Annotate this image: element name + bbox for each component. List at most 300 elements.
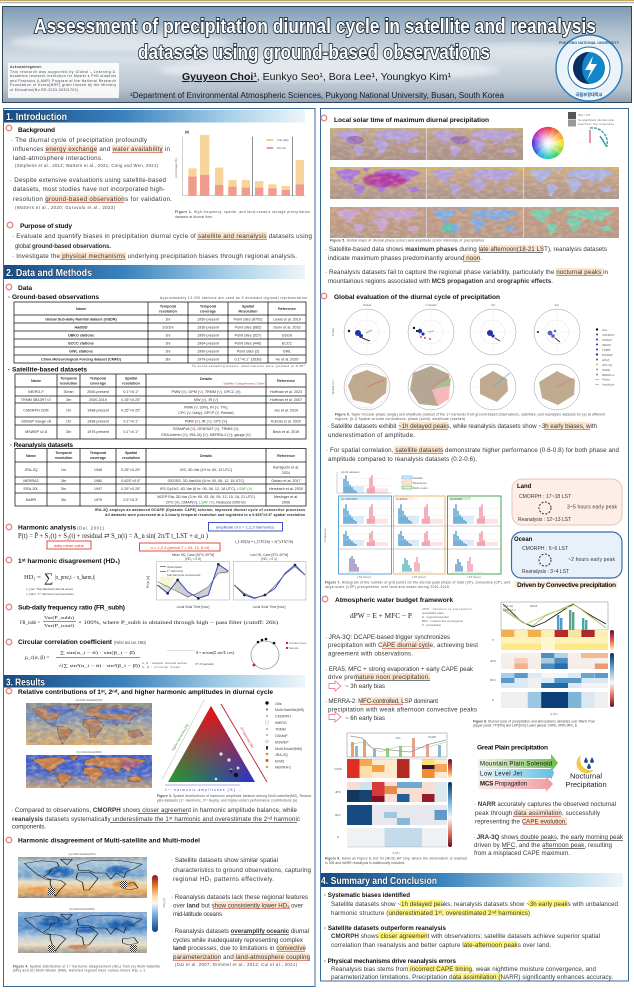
nocturnal precipitation label: Nocturnal bbox=[570, 772, 602, 780]
figure caption: polar: regions. (b-f) Spatial circular correlations, phase (solid), amplitude (dashed) bbox=[335, 417, 465, 421]
satellite table: 0.25°×0.25° bbox=[121, 398, 141, 402]
polar legend: NARR bbox=[602, 368, 610, 372]
reanalysis table: 3hr bbox=[61, 498, 67, 502]
harmonic line charts: Observation bbox=[167, 565, 183, 569]
reanalysis table: coverage bbox=[90, 456, 106, 460]
circular correlation: ᾱ, β̄ : circular mean bbox=[142, 665, 180, 669]
phase findings: · Reanalysis datasets fail to capture the regional phase variability, particularly the nocturnal peaks in bbox=[325, 269, 609, 276]
great plain arrows: Mountain Plain Solenoid bbox=[480, 762, 552, 768]
ground-based table: UBKO stations bbox=[68, 334, 94, 338]
colorbar: HD₁ [σ] bbox=[162, 898, 166, 908]
water budget chart one: MFC bbox=[490, 678, 496, 682]
sub-daily frequency ratio bbox=[6, 604, 278, 628]
satellite and reanalysis findings: parameterization and land-atmosphere coupling bbox=[173, 954, 311, 961]
nocturnal precipitation label: Precipitation bbox=[565, 780, 607, 789]
heat block one bbox=[347, 759, 447, 778]
circular correlation: Circular correlation coefficient bbox=[18, 639, 113, 646]
histogram panel: (b) CMORPH bbox=[341, 497, 358, 501]
map: multi-satellite: (a) Multi-Satellite(MS) bbox=[75, 698, 103, 702]
narr jra text: from a misplaced CAPE maximum. bbox=[474, 850, 570, 857]
background block: land-atmosphere interactions. bbox=[13, 155, 103, 162]
figure 1 bar chart: percentage [%] bbox=[174, 158, 178, 177]
water budget chart one: MERRA-2 bbox=[503, 608, 516, 612]
figure caption: HD: (MS) and (b) Multi-Model (MM). Hatched regions have values where HD₁ ≥ 1 bbox=[13, 968, 145, 972]
ground-based table: Point sites (2) bbox=[237, 350, 259, 354]
satellite table: MSWEP v2.8 bbox=[25, 430, 47, 434]
reanalysis table: NARR bbox=[26, 498, 37, 502]
background block: · Despite extensive evaluations using satellite-based bbox=[10, 177, 167, 184]
ground-based table: HadISD bbox=[74, 326, 88, 330]
harmonic line charts bbox=[146, 553, 306, 609]
section 4 heading bbox=[321, 873, 623, 887]
comparison text bbox=[11, 807, 300, 830]
sub-daily frequency ratio: Sub-daily frequency ratio (FR_subh) bbox=[18, 604, 125, 612]
figure 1 bar chart: datasets at diurnal time. bbox=[175, 215, 213, 219]
satellite table: Spatial bbox=[125, 376, 137, 380]
jra era merra text: · JRA-3Q: DCAPE-based trigger synchronizes bbox=[325, 634, 450, 641]
figure caption: histogram: large-scale (LSP) precipitation over land and ocean during 2001-2016. bbox=[325, 585, 450, 589]
harmonic line charts: Sub-harmonic components bbox=[167, 573, 201, 577]
phase map row 1 bbox=[330, 128, 523, 160]
satellite and reanalysis findings: characteristics to ground observations, capturing bbox=[173, 867, 312, 874]
affiliation: ¹Department of Environmental Atmospheric Sciences, Pukyong National University, Busan, South Korea bbox=[130, 91, 505, 100]
satellite table: resolution bbox=[60, 382, 78, 386]
reanalysis table: GEOSS, 3D-Var/IAU (6 hr: 00, 06, 12, 18 UTC) bbox=[168, 479, 244, 483]
land callout bbox=[512, 479, 622, 525]
map: multi-model bbox=[26, 750, 152, 788]
satellite table: Satellite / Gauge-based / Other bbox=[223, 382, 265, 386]
figure caption: chart one: (Upper panel: TP [hPa] and LSP [mm]; Lower panels: CAPE, dPW, MFC, E. bbox=[473, 724, 578, 728]
satellite table: 2000-2019 bbox=[89, 398, 107, 402]
ground-based table: 1hr bbox=[165, 342, 171, 346]
sub-daily frequency ratio: × 100%, where P_subh is obtained through high − pass filter (cutoff: 26h) bbox=[78, 619, 278, 626]
ground-based table: · Ground-based observations bbox=[8, 294, 99, 301]
ocean callout bbox=[512, 532, 622, 578]
map: HD multi-model bbox=[18, 907, 147, 953]
acknowledgment box: This research was supported by Global – Learning & bbox=[10, 70, 116, 74]
university logo: 국립부경대학교 bbox=[576, 91, 603, 98]
amplitude callout bbox=[208, 522, 282, 531]
reanalysis table: 0.625°×0.5° bbox=[121, 479, 141, 483]
colorbar bbox=[152, 875, 166, 932]
satellite table: 1hr bbox=[66, 408, 72, 412]
water budget equation: MFC : moisture flux convergence bbox=[422, 619, 463, 623]
first harmonic disagreement: |x_prec,t − x_harm,t| bbox=[55, 575, 95, 581]
ground-based table: China Meteorological Forcing dataset (CMFD) bbox=[41, 358, 122, 362]
clock diagram: Circular mean bbox=[289, 641, 307, 645]
ternary legend: JRA-3Q bbox=[275, 753, 288, 757]
great plain arrows: Low Level Jet bbox=[480, 772, 522, 778]
ground-based table: Point sites (527) bbox=[235, 334, 261, 338]
ground-based table: coverage bbox=[200, 310, 216, 314]
satellite table: PMW (V), IR (V), CPC (V) bbox=[185, 420, 227, 424]
jra era merra text: drive premature noon precipitation. bbox=[328, 674, 430, 681]
first harmonic disagreement: HD₁ = bbox=[24, 574, 41, 581]
histogram panel: LST (hour) bbox=[412, 575, 426, 579]
ternary legend: Multi-Model(MM) bbox=[275, 747, 302, 751]
purpose of study bbox=[7, 222, 313, 260]
reanalysis table: 1980 bbox=[94, 479, 102, 483]
title: datasets using ground-based observations bbox=[138, 42, 490, 64]
figure caption: phase: Figure 5. Global maps of diurnal phase (color) and amplitude (color intensity) of precipitation. bbox=[330, 238, 485, 242]
map: HD multi-satellite bbox=[18, 852, 147, 898]
comparison text: components. bbox=[12, 824, 46, 830]
ternary legend: Multi-Satellite(MS) bbox=[275, 708, 304, 712]
heat block four bbox=[347, 828, 447, 847]
water budget chart two: dPW bbox=[335, 790, 341, 794]
background block: Background bbox=[18, 127, 55, 134]
circular correlation: ∑ sin(α_i − ᾱ) · sin(β_i − β̄) bbox=[60, 650, 136, 655]
great plain heading: Great Plain precipitation bbox=[477, 744, 548, 752]
circular correlation bbox=[6, 638, 307, 669]
water budget chart one: dPW bbox=[490, 659, 496, 663]
polar legend: IMERG bbox=[602, 343, 611, 347]
ternary legend: Obs bbox=[275, 702, 282, 706]
first harmonic disagreement bbox=[6, 557, 120, 596]
reanalysis table: 2006 bbox=[282, 500, 290, 504]
arrow: early bias 6h bbox=[329, 712, 385, 722]
phase findings: mountainous regions associated with MCS propagation and orographic effects. bbox=[328, 278, 553, 285]
reanalysis table: resolution bbox=[122, 456, 141, 460]
satellite table: PMW (V), GPM (V), TRMM (V), GPCC (V) bbox=[171, 390, 241, 394]
figure caption: ternary: ysis-datasets (1ˢᵗ Harmonic, 2ⁿᵈ Gophy, and higher-order) performance contributions (a) bbox=[157, 798, 297, 802]
reanalysis table: 3hr bbox=[61, 487, 67, 491]
jra era merra text: · ERA5: MFC + strong evaporation + early CAPE peak bbox=[325, 666, 474, 673]
ternary legend: IMERG bbox=[275, 721, 287, 725]
water budget chart one bbox=[490, 602, 614, 716]
background block: (Stephens et al., 2012; Watters et al., 2021; Cong and Wen, 2021) bbox=[15, 163, 159, 168]
figure 1 bar chart: Diurnal bbox=[277, 146, 286, 150]
ground-based table: 1979-present bbox=[197, 358, 219, 362]
ground-based table: 3hr bbox=[165, 358, 171, 362]
arrow: early bias 3h: ~ 3h early bias bbox=[345, 683, 385, 690]
satellite table: coverage bbox=[90, 382, 106, 386]
satellite table: 1998-present bbox=[87, 420, 109, 424]
map: multi-satellite bbox=[26, 698, 152, 745]
satellite table: Temporal bbox=[90, 376, 106, 380]
ground-based table: Point sites (8702) bbox=[234, 318, 262, 322]
ground-based table: Point sites (446) bbox=[235, 342, 261, 346]
reanalysis table: 1hr bbox=[61, 468, 67, 472]
purpose of study: Purpose of study bbox=[20, 223, 72, 230]
daily mean callout bbox=[47, 541, 91, 549]
ternary legend: TRMM bbox=[275, 728, 286, 732]
satellite table: 30min bbox=[63, 390, 74, 394]
polar spatial correlation row: Spatial corr. bbox=[331, 379, 335, 394]
global evaluation findings: · For spatial correlation, satellite datasets demonstrate higher performance (0.6-0.8) for both phase and bbox=[326, 447, 620, 454]
polar phase row: Global bbox=[363, 303, 371, 307]
color wheel bbox=[532, 127, 564, 159]
satellite and reanalysis findings: · Reanalysis datasets lack these regional features bbox=[171, 894, 308, 901]
summary: satellite outperform: correlation than reanalysis and better capture late-afternoon peaks over land. bbox=[331, 942, 551, 949]
phase findings bbox=[325, 245, 609, 285]
land callout: 3~5 hours early peak bbox=[567, 504, 618, 510]
phase findings: indicate maximum phases predominantly around noon. bbox=[328, 255, 482, 262]
satellite table: Huffman et al. 2023 bbox=[270, 390, 302, 394]
reanalysis table: Reference bbox=[277, 454, 295, 458]
summary: physical mechanisms: · Physical mechanisms drive reanalysis errors bbox=[324, 958, 457, 965]
satellite table: Reference bbox=[277, 379, 295, 383]
water budget chart one: [LST] bbox=[551, 712, 558, 716]
satellite table: Kubota et al. 2020 bbox=[271, 420, 301, 424]
satellite table: Beck et al. 2019 bbox=[273, 430, 299, 434]
water budget chart two: E bbox=[337, 835, 339, 839]
reanalysis table: Details bbox=[200, 454, 212, 458]
summary: physical mechanisms bbox=[324, 958, 613, 981]
ground-based table: 1950-present bbox=[197, 318, 219, 322]
water budget chart two: CAPE bbox=[334, 767, 342, 771]
icon: moon and droplets bbox=[577, 755, 594, 773]
ground-based table: Temporal bbox=[200, 304, 216, 308]
water budget chart two: [LST] bbox=[393, 851, 400, 855]
satellite and reanalysis findings bbox=[171, 857, 312, 967]
phase map row 3 bbox=[330, 207, 619, 238]
ground-based table: 1964-present bbox=[197, 342, 219, 346]
figure caption: ternary: Figure 3. Spatial distributions of harmonic amplitude balance among Multi-satellite(MS), Reanal- bbox=[157, 794, 312, 798]
jra era merra text: agreement with observations. bbox=[328, 650, 413, 658]
background block: datasets, most studies have not incorporated high- bbox=[13, 186, 165, 193]
polar spatial correlation row bbox=[331, 364, 580, 410]
polar legend: ERA5 bbox=[602, 358, 610, 362]
phase findings: · Satellite-based data shows maximum phases during late afternoon(18-21 LST), reanalysis datasets bbox=[325, 246, 607, 253]
reanalysis table: JRA-3Q bbox=[24, 468, 38, 472]
reanalysis table: 0.25°×0.25° bbox=[121, 468, 141, 472]
jra era merra text bbox=[325, 634, 478, 714]
acknowledgment box: Academic research institution for Master's PhD students bbox=[10, 74, 116, 78]
reanalysis table: Hersbach et al. 2020 bbox=[269, 487, 303, 491]
harmonic line charts: (HD₁ = 0.1) bbox=[261, 557, 277, 561]
ground-based table: GWL bbox=[283, 350, 291, 354]
satellite table: 1hr bbox=[66, 420, 72, 424]
satellite table: 1998-present bbox=[87, 408, 109, 412]
nocturnal precipitation label bbox=[565, 772, 607, 789]
harmonic analysis: Harmonic analysis bbox=[18, 524, 76, 532]
jra era merra text: precipitation with weak afternoon convective peaks bbox=[328, 706, 477, 714]
ground-based table: ECCC stations bbox=[68, 342, 94, 346]
local solar time heading: Local solar time of maximum diurnal precipitation bbox=[334, 117, 489, 124]
satellite table: CPC (V, Daily), GPCP (V, Pentad) bbox=[178, 411, 234, 415]
section 2 heading: 2. Data and Methods bbox=[6, 268, 92, 279]
global evaluation heading: Global evaluation of the diurnal cycle of precipitation bbox=[334, 294, 500, 301]
ground-based table: GWL stations bbox=[69, 350, 93, 354]
harmonic line charts: Mean HD₁ Case [45°N, 95°W] bbox=[172, 553, 214, 557]
map: multi-model: (b) Multi-Model(MM) bbox=[76, 750, 102, 754]
reanalysis table: Temporal bbox=[55, 451, 72, 455]
narr jra text: · NARR accurately captures the observed nocturnal bbox=[474, 801, 616, 808]
satellite table: 2000-present bbox=[87, 390, 109, 394]
ocean callout: CMORPH : 5~6 LST bbox=[522, 546, 568, 552]
satellite table: TRMM 3B42RT v7 bbox=[21, 398, 51, 402]
ternary plot bbox=[162, 700, 267, 792]
section 4 heading: 4. Summary and Conclusion bbox=[321, 876, 437, 887]
polar legend: MERRA-2 bbox=[602, 373, 615, 377]
university logo bbox=[556, 35, 622, 101]
harmonic line charts: Prcp [σ] bbox=[146, 576, 150, 588]
background block bbox=[6, 125, 172, 210]
header banner bbox=[2, 6, 632, 102]
summary: systematic biases bbox=[324, 892, 619, 917]
sub-daily frequency ratio: FR_subh = bbox=[20, 620, 40, 626]
circular correlation: α, β : sample diurnal series bbox=[142, 661, 188, 665]
reanalysis table: Spatial bbox=[125, 451, 137, 455]
figure caption: chart two bbox=[325, 856, 467, 865]
histogram panel bbox=[323, 470, 501, 579]
satellite table: 0.1°×0.1° bbox=[123, 420, 139, 424]
reanalysis table: Kamiguchi et al. bbox=[273, 466, 299, 470]
histogram panel: LST (hour) bbox=[467, 575, 481, 579]
acknowledgment box: of Education(No.RS-2023-00301702) bbox=[10, 88, 78, 92]
ternary plot: 1ˢᵗ harmonic amplitudes [%] → bbox=[165, 788, 241, 792]
acknowledgment box: Foundation of Korea(NRF) grant funded by the Ministry bbox=[10, 83, 116, 87]
ternary legend: CMORPH bbox=[275, 714, 291, 718]
reanalysis table: NCEP Eta, 3D-Var (3 hr: 00, 03, 06, 09, 12, 15, 18, 21 UTC) bbox=[157, 495, 255, 499]
top border strip bbox=[0, 0, 634, 3]
great plain arrows: MCS Propagation bbox=[480, 782, 527, 788]
ternary legend: MSWEP bbox=[275, 740, 289, 744]
harmonic line charts: (HD₁ = 0.6) bbox=[185, 557, 201, 561]
histogram panel: (d) NARR bbox=[450, 497, 462, 501]
figure caption: chart one bbox=[473, 720, 595, 728]
polar legend: MSWEP bbox=[602, 353, 613, 357]
figure caption: histogram: Figure 7. Histogram of the number of grid points for the diurnal peak phase of total (CP), convective (CP), and bbox=[325, 580, 510, 584]
reanalysis table: 2024 bbox=[282, 471, 290, 475]
figure 1 bar chart: (a) bbox=[185, 130, 189, 134]
satellite table: GSMaPv8 (V), GRIDSAT (V), TRMM (V), bbox=[173, 427, 239, 431]
arrow: early bias 6h: ~ 6h early bias bbox=[345, 715, 385, 722]
ground-based table: Reference bbox=[278, 307, 296, 311]
harmonic analysis bbox=[6, 522, 293, 551]
figure caption: polar: Figure 6. Taylor-Circular-phase (angle) and amplitude (radius) of the 1ˢᵗ harmonic from ground-based observations, satellites, and reanalysis datasets for (a) at different bbox=[335, 412, 605, 416]
title bbox=[34, 16, 596, 64]
clock diagram: Sample bbox=[289, 646, 299, 650]
water budget equation: dPW : Variation of atmospheric bbox=[422, 607, 473, 611]
polar legend: Phase bbox=[602, 378, 610, 382]
narr jra text: · JRA-3Q shows double peaks, the early morning peak bbox=[473, 834, 624, 841]
water budget chart one: JRA-3Q bbox=[503, 604, 514, 608]
ternary legend: MERRA-2 bbox=[275, 766, 291, 770]
phase callout: n = 1,2,3 (period T = 24, 12, 8 hr) bbox=[151, 545, 210, 550]
satellite table: MW (V), IR (V) bbox=[194, 398, 218, 402]
jra era merra text: · MERRA-2: MFC-controlled, LSP dominant bbox=[325, 698, 438, 705]
ground-based table: Global Sub-daily Rainfall dataset (GSDR) bbox=[45, 318, 118, 322]
background block: (Watters et al., 2020; Guruvulu et al., 2023) bbox=[15, 205, 116, 210]
water budget chart two: MFC bbox=[335, 813, 341, 817]
section 2 heading bbox=[4, 265, 305, 279]
reanalysis table: CPC (V), CMAP(V), LSAF (V), Reduced 2000 km bbox=[166, 500, 246, 504]
land callout: CMORPH : 17~18 LST bbox=[519, 494, 571, 500]
harmonic disagreement heading: Harmonic disagreement of Multi-satellite and Multi-model bbox=[18, 838, 200, 844]
satellite and reanalysis findings: over land but show consistently lower HD₁ over bbox=[173, 902, 303, 910]
satellite table: PMW (V, 30%), IR (V, 7%), bbox=[184, 406, 228, 410]
reanalysis table: resolution bbox=[55, 456, 73, 460]
wheel legend swatches bbox=[568, 112, 614, 126]
water budget equation: dPW = E + MFC − P bbox=[350, 611, 412, 620]
water budget equation: E : evapotranspiration bbox=[422, 615, 450, 619]
land callout: Land bbox=[517, 484, 532, 490]
satellite table: Temporal bbox=[60, 376, 77, 380]
map: HD multi-model: (b) Multi-Model(MM) bbox=[69, 907, 95, 911]
histogram legend: Reanalysis bbox=[413, 481, 427, 485]
jra era merra text: precipitation with CAPE diurnal cycle, achieving best bbox=[328, 642, 478, 649]
satellite and reanalysis findings: mid-latitude oceans bbox=[173, 911, 222, 918]
satellite table: CMORPH CDR bbox=[23, 408, 49, 412]
global evaluation findings: · Satellite datasets exhibit ~1h delayed peaks, while reanalysis datasets show ~3h early biases, with bbox=[327, 423, 598, 430]
satellite table: · Satellite-based datasets bbox=[8, 366, 87, 374]
section 3 heading bbox=[4, 675, 305, 688]
daily mean callout: daily mean value bbox=[54, 543, 85, 548]
satellite table: Joo et al. 2019 bbox=[274, 408, 298, 412]
ground-based table: Name bbox=[76, 307, 86, 311]
ternary legend: ERA5 bbox=[275, 760, 284, 764]
figure 1 bar chart bbox=[174, 130, 310, 219]
water budget chart one: P bbox=[492, 638, 494, 642]
ground-based table: USGS bbox=[282, 334, 293, 338]
figure caption: polar bbox=[335, 412, 605, 421]
satellite table bbox=[8, 366, 306, 439]
histogram panel: (c) ERA5 bbox=[396, 497, 408, 501]
polar legend bbox=[595, 328, 615, 386]
ternary legend: GSMaP bbox=[275, 734, 288, 738]
ground-based table: resolution bbox=[159, 310, 178, 314]
polar phase row: Phase bbox=[331, 328, 335, 336]
data heading bbox=[6, 284, 32, 292]
satellite and reanalysis findings: (Dai et al. 2007; Drimmel et al., 2012; Cui et al., 2021) bbox=[175, 962, 298, 967]
circular correlation: √(∑ sin²(α_i − ᾱ) · sin²(β_i − β̄)) bbox=[58, 663, 141, 668]
harmonic analysis: P(t) = P̄ + S₁(t) + S₂(t) + residual ⇄ S_n(t) = A_n sin( 2π/T t_LST + α_n ) bbox=[18, 532, 209, 540]
reanalysis table: 1947 bbox=[94, 487, 102, 491]
satellite table: 0.25°×0.25° bbox=[121, 408, 141, 412]
satellite table: 3hr bbox=[66, 398, 72, 402]
summary: systematic biases: · Systematic biases identified bbox=[324, 892, 410, 899]
arrow: early bias 3h bbox=[329, 681, 385, 691]
summary: physical mechanisms: Reanalysis bias stems from incorrect CAPE timing, weak nighttime moisture convergence, and bbox=[331, 966, 597, 973]
histogram panel: (a) All datasets bbox=[341, 470, 360, 474]
water budget chart two: Obs bbox=[395, 736, 401, 740]
ground-based table: To avoid sampling biases, observations were gridded at 0.25° bbox=[192, 364, 306, 368]
circular correlation: ρ_c(α, β) = bbox=[25, 654, 50, 661]
summary: systematic biases: Satellite datasets show ~1h delayed peaks, reanalysis datasets show ~3h early peaks with unbalanced bbox=[331, 901, 619, 908]
harmonic analysis: t_LST(h) = t_UTC(h) + λ(°)/15(°/h) bbox=[235, 539, 293, 544]
map: HD multi-satellite: (a) Multi-Satellite(MS) bbox=[68, 852, 96, 856]
polar phase row bbox=[331, 303, 580, 355]
satellite table: Name bbox=[31, 379, 41, 383]
reanalysis table: 3hr bbox=[61, 479, 67, 483]
ground-based table: Approximately 13,000 stations are used as 5 dominant regional representation bbox=[160, 296, 307, 300]
polar legend: Amplitude bbox=[602, 382, 615, 386]
global evaluation findings: underestimation of amplitude. bbox=[328, 432, 415, 439]
phase map row 2 bbox=[330, 167, 619, 199]
reanalysis table: 0.3°×0.3° bbox=[123, 498, 139, 502]
reanalysis table: 0.25°×0.25° bbox=[121, 487, 141, 491]
purpose of study: · Investigate the physical mechanisms underlying precipitation biases through regional analysis. bbox=[12, 253, 297, 260]
authors: Gyuyeon Choi¹, Eunkyo Seo¹, Bora Lee¹, Youngkyo Kim¹ bbox=[182, 71, 452, 83]
polar legend: GSMaP bbox=[602, 338, 612, 342]
water budget chart two bbox=[334, 733, 452, 855]
ground-based table: 1hr bbox=[165, 318, 171, 322]
ground-based table: Temporal bbox=[160, 304, 176, 308]
figure caption: chart two: in 305 and NARR reanalysis is additionally included. bbox=[325, 861, 405, 865]
summary: systematic biases: harmonic structure (underestimated 1ˢᵗ, overestimated 2ⁿᵈ harmonics) bbox=[331, 910, 530, 917]
histogram legend bbox=[402, 476, 428, 490]
harmonic line charts: Local Solar Time [hour] bbox=[253, 605, 285, 609]
water budget equation: P : precipitation bbox=[422, 623, 442, 627]
reanalysis table: IRA-3Q employs an advanced DCAPE (Dynamic CAPE) scheme; improved diurnal cycle of convective processes bbox=[95, 508, 305, 512]
circular correlation: (T= 8 periods) bbox=[195, 662, 214, 666]
purpose of study: · Evaluate and quantify biases in precipitation diurnal cycle of satellite and reanalysis datasets using bbox=[12, 233, 313, 240]
satellite table: 3hr bbox=[66, 430, 72, 434]
ground-based table: 1990-present bbox=[197, 350, 219, 354]
polar legend: JRA-3Q bbox=[602, 363, 613, 367]
